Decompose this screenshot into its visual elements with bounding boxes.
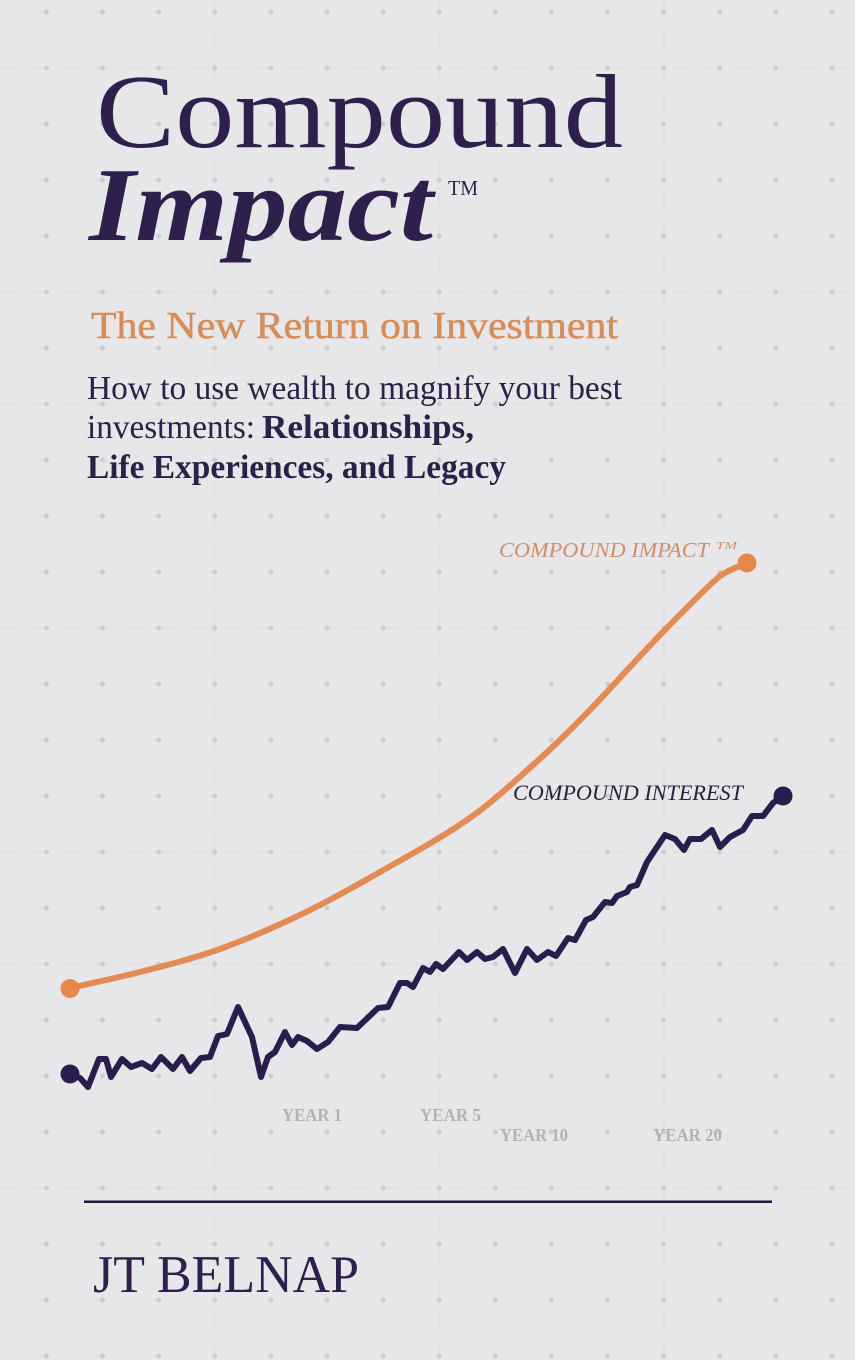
author rule: [84, 1200, 772, 1203]
label: compound impact: COMPOUND IMPACT: [499, 538, 710, 562]
title: Compound: Compound: [96, 53, 623, 170]
description bold: Relationships: Relationships,: [262, 409, 474, 446]
author name: JT BELNAP: [93, 1246, 359, 1304]
title: Impact: Impact: [87, 146, 436, 263]
axis label: year 1: YEAR 1: [282, 1105, 342, 1125]
trademark mark: TM: [448, 176, 478, 200]
label: compound interest: COMPOUND INTEREST: [513, 780, 745, 805]
navy compound interest line: [60, 786, 792, 1087]
description bold: Life Experiences, and Legacy: Life Experiences, and Legacy: [87, 449, 506, 486]
axis label: year 5: YEAR 5: [420, 1105, 481, 1125]
description: [87, 370, 623, 486]
description line 2: investments:: [87, 409, 255, 446]
chart: [60, 538, 792, 1145]
label: trademark: TM: [716, 540, 738, 552]
axis label: year 20: YEAR 20: [653, 1125, 722, 1145]
subtitle: The New Return on Investment: [91, 305, 618, 347]
orange compound impact curve: [60, 554, 756, 998]
description line 1: How to use wealth to magnify your best: [87, 370, 623, 407]
title: [87, 53, 623, 263]
axis label: year 10: YEAR 10: [500, 1125, 568, 1145]
